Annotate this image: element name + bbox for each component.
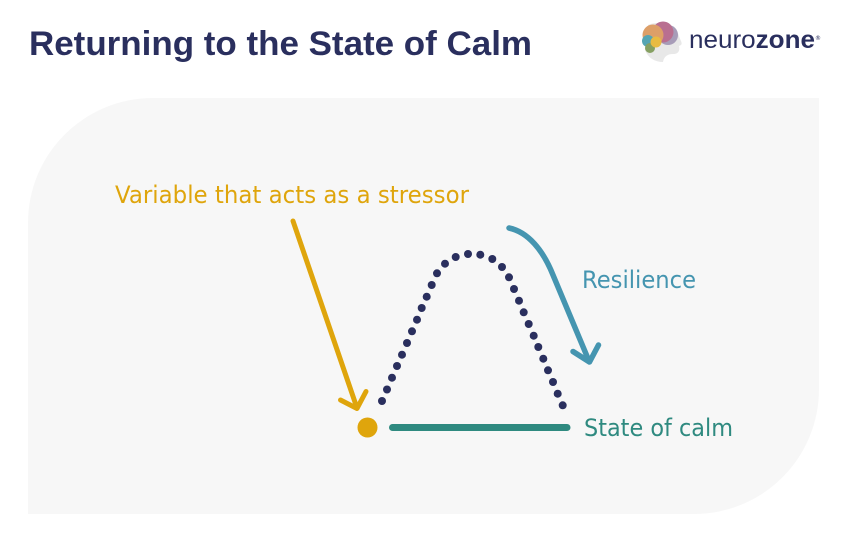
- label: resilience: Resilience: [582, 266, 696, 294]
- dot: stressor point: [358, 418, 378, 438]
- dotted curve: stress response: [378, 250, 567, 409]
- label: stressor: Variable that acts as a stressor: [115, 181, 469, 209]
- title: Returning to the State of Calm: [29, 25, 532, 63]
- logo registered mark: ®: [815, 35, 821, 42]
- logo: neurozone: [642, 22, 821, 62]
- logo wordmark: neurozone: [689, 26, 815, 54]
- line: state of calm: [392, 424, 567, 431]
- icon: brain circles: [642, 22, 678, 53]
- label: state of calm: State of calm: [584, 414, 733, 442]
- arrow: resilience: [509, 228, 598, 362]
- icon: head silhouette: [645, 23, 682, 62]
- arrow: stressor: [293, 221, 366, 408]
- panel: background: [28, 98, 819, 514]
